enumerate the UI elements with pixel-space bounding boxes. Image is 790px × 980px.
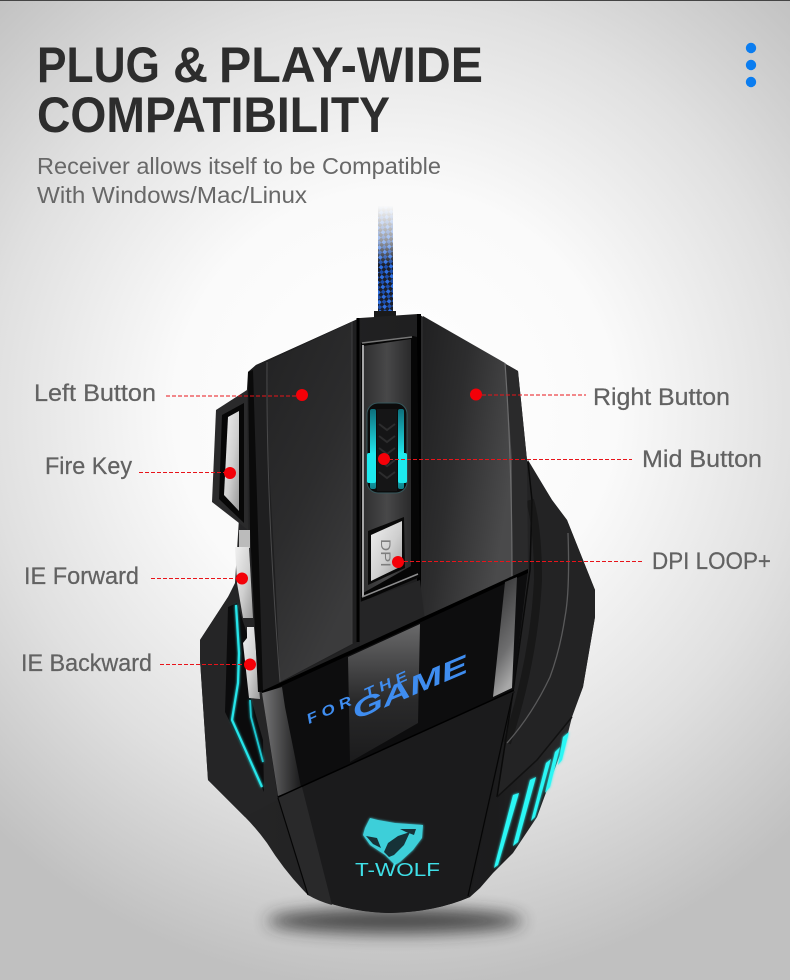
for the game logo: FOR THE <box>304 666 414 727</box>
callout: right button <box>470 384 730 411</box>
right button <box>418 314 528 625</box>
left side panel <box>200 583 278 817</box>
IE backward button <box>243 627 260 699</box>
center strip <box>361 336 420 602</box>
callout: fire key <box>45 453 236 480</box>
cyan grip stripes <box>494 732 569 868</box>
subtitle: Receiver allows itself to be Compatible <box>37 153 441 179</box>
right side grip <box>497 460 595 797</box>
subtitle <box>37 153 441 208</box>
title <box>37 37 483 143</box>
title: PLAY-WIDE <box>219 37 483 93</box>
DPI button <box>368 517 405 585</box>
callout: mid button: Mid Button <box>642 446 762 473</box>
cable <box>374 205 396 342</box>
shadow under mouse <box>267 908 523 934</box>
wolf shield <box>363 818 423 865</box>
callout: IE backward <box>21 650 256 677</box>
title: COMPATIBILITY <box>37 87 390 143</box>
lower center panel <box>360 580 425 657</box>
front gloss band <box>262 569 528 798</box>
subtitle: With Windows/Mac/Linux <box>37 182 307 208</box>
side cyan lights <box>225 603 264 792</box>
left button <box>248 318 362 692</box>
title: & <box>173 37 208 93</box>
T-WOLF wordmark: T-WOLF <box>355 860 440 880</box>
callout: left button <box>34 380 308 407</box>
callout: IE backward: IE Backward <box>21 650 152 677</box>
DPI button: DPI <box>378 539 394 567</box>
callout: right button: Right Button <box>593 384 730 411</box>
callout: DPI loop <box>392 548 771 575</box>
callout: mid button <box>378 446 762 473</box>
IE forward button <box>235 530 253 618</box>
body shell <box>200 314 595 913</box>
icon: menu dots <box>746 43 756 87</box>
palm rest <box>278 691 514 913</box>
callout: IE forward: IE Forward <box>24 563 139 590</box>
callout: DPI loop: DPI LOOP+ <box>652 548 771 575</box>
callout: left button: Left Button <box>34 380 156 407</box>
fire key <box>212 390 248 530</box>
scroll wheel <box>367 403 407 493</box>
callout: fire key: Fire Key <box>45 453 133 480</box>
callout: IE forward <box>24 563 248 590</box>
title: PLUG <box>37 37 160 93</box>
mouse illustration <box>200 205 595 934</box>
for the game logo <box>304 649 473 727</box>
T-Wolf logo <box>355 818 440 880</box>
for the game logo: GAME <box>349 649 473 726</box>
